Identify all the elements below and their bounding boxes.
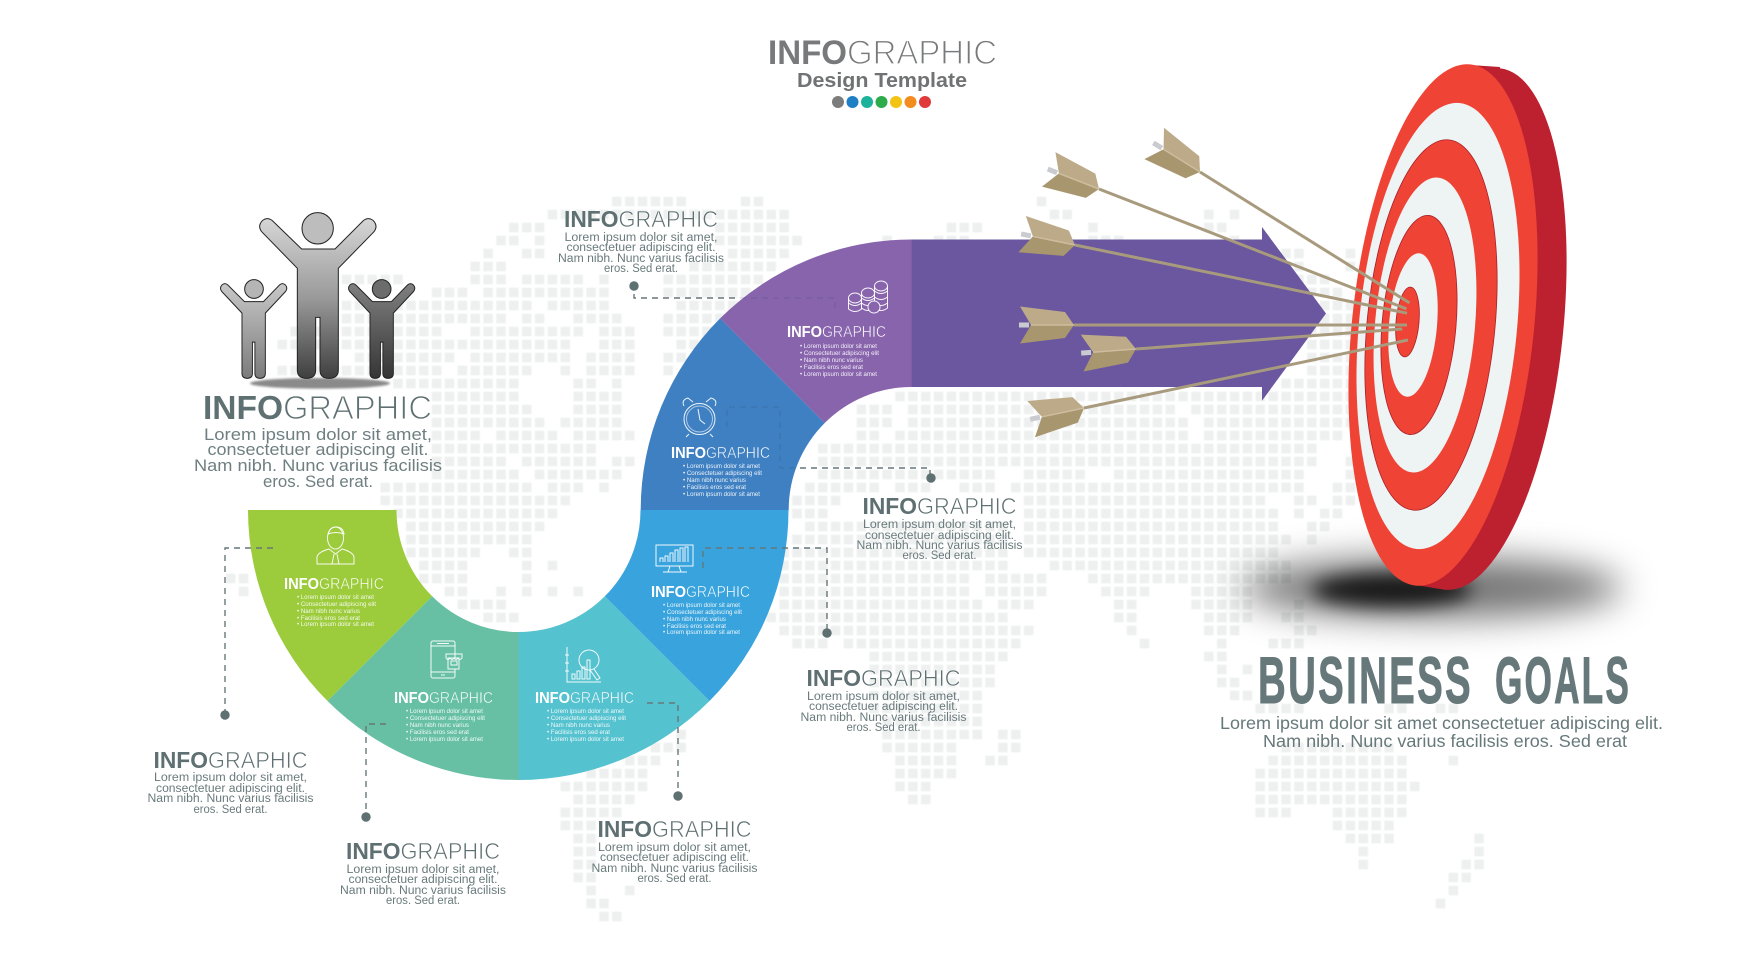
text block: step 2 caption: Nam nibh. Nunc varius facilisis	[340, 885, 506, 897]
text block: step 1 caption: Lorem ipsum dolor sit amet,	[154, 772, 307, 784]
callout leader: step 3	[647, 703, 683, 801]
panel: red target	[1325, 55, 1590, 599]
top title block	[768, 34, 997, 108]
panel: step 2 teal: • Consectetuer adipiscing elit	[406, 715, 485, 722]
icon: coin stacks	[848, 281, 888, 313]
text block: step 5 caption: consectetuer adipiscing elit.	[865, 530, 1014, 542]
arrow: bottom arrow in target	[1026, 322, 1412, 437]
text block: step 2 caption: Lorem ipsum dolor sit amet,	[346, 864, 500, 876]
callout leader: step 1	[220, 548, 273, 720]
left heading text block: eros. Sed erat.	[263, 473, 373, 491]
text block: step 4 caption: eros. Sed erat.	[846, 722, 920, 734]
text block: step 4 caption: consectetuer adipiscing elit.	[809, 701, 958, 713]
panel: step 6 purple: • Facilisis eros sed erat	[800, 364, 863, 371]
text block: step 5 caption: INFO	[862, 493, 917, 519]
panel: step 1 green: • Facilisis eros sed erat	[297, 615, 360, 622]
text block: step 1 caption: Nam nibh. Nunc varius facilisis	[148, 793, 314, 805]
panel: step 6 purple: INFO	[787, 324, 822, 341]
text block: step 4 caption	[800, 665, 967, 734]
top title block: INFO	[768, 34, 847, 72]
text block: step 5 caption	[856, 493, 1023, 562]
panel: step 4 sky blue: • Consectetuer adipiscing elit	[663, 609, 742, 616]
icon: chart and magnifier	[565, 647, 601, 682]
panel: step 4 sky blue: • Lorem ipsum dolor sit amet	[663, 629, 740, 636]
arrow: third arrow in target	[1017, 216, 1411, 331]
text block: step 6 caption: INFO	[564, 206, 618, 232]
panel: step 2 teal	[328, 596, 518, 780]
panel: business goals text: Nam nibh. Nunc varius facilisis eros. Sed erat	[1263, 731, 1627, 751]
text block: step 3 caption: eros. Sed erat.	[638, 873, 712, 885]
left heading text block: INFO	[203, 389, 283, 426]
panel: step 3 cyan: • Facilisis eros sed erat	[547, 729, 610, 736]
panel: step 5 dark blue: • Lorem ipsum dolor sit amet	[683, 491, 760, 498]
icon: monitor with bars	[656, 545, 693, 572]
text block: step 4 caption: INFO	[806, 665, 861, 691]
panel: step 5 dark blue: GRAPHIC	[706, 445, 770, 462]
text block: step 4 caption: Nam nibh. Nunc varius facilisis	[800, 712, 967, 724]
text block: step 3 caption: GRAPHIC	[652, 816, 752, 842]
text block: step 3 caption: consectetuer adipiscing elit.	[600, 852, 749, 864]
text block: step 5 caption: eros. Sed erat.	[902, 550, 976, 562]
panel: step 6 purple: • Consectetuer adipiscing elit	[800, 350, 879, 357]
arrow: top arrow in target	[1144, 127, 1419, 319]
panel: step 4 sky blue	[605, 510, 789, 701]
panel: step 1 green	[248, 510, 432, 701]
top title block: Design Template	[797, 70, 967, 92]
panel: business goals text: Lorem ipsum dolor sit amet consectetuer adipiscing elit.	[1220, 713, 1663, 733]
panel: step 2 teal: GRAPHIC	[429, 690, 493, 707]
top title block: GRAPHIC	[847, 34, 997, 72]
panel: step 6 purple	[720, 239, 912, 423]
text block: step 1 caption: INFO	[154, 747, 208, 773]
icon: family of three people	[221, 213, 415, 389]
panel: step 2 teal: • Facilisis eros sed erat	[406, 729, 469, 736]
left heading text block: Nam nibh. Nunc varius facilisis	[194, 457, 442, 475]
arrow: second arrow in target	[1041, 152, 1413, 326]
left heading text block: Lorem ipsum dolor sit amet,	[204, 426, 432, 444]
icon: businessman	[317, 527, 354, 564]
panel: step 2 teal: INFO	[394, 690, 429, 707]
text block: step 6 caption: Lorem ipsum dolor sit amet,	[564, 232, 718, 244]
panel: step 3 cyan: • Lorem ipsum dolor sit amet	[547, 736, 624, 743]
dotted world map background	[224, 202, 1486, 916]
panel: step 6 purple: GRAPHIC	[822, 324, 886, 341]
arrow: fifth arrow in target	[1080, 311, 1404, 372]
panel: step 2 teal: • Lorem ipsum dolor sit amet	[406, 736, 483, 743]
panel: step 6 purple: • Nam nibh nunc varius	[800, 357, 864, 364]
left heading text block: GRAPHIC	[283, 389, 432, 426]
text block: step 5 caption: Nam nibh. Nunc varius facilisis	[856, 540, 1023, 552]
panel: step 5 dark blue: • Facilisis eros sed erat	[683, 484, 746, 491]
panel: step 5 dark blue: • Nam nibh nunc varius	[683, 477, 747, 484]
text block: step 2 caption	[340, 838, 506, 907]
panel: step 4 sky blue: INFO	[651, 584, 686, 601]
text block: step 4 caption: Lorem ipsum dolor sit amet,	[807, 691, 960, 703]
text block: step 2 caption: INFO	[346, 838, 400, 864]
text block: step 6 caption: GRAPHIC	[618, 206, 718, 232]
text block: step 5 caption: Lorem ipsum dolor sit amet,	[863, 519, 1016, 531]
panel: step 4 sky blue: • Nam nibh nunc varius	[663, 616, 727, 623]
panel: step 5 dark blue: INFO	[671, 445, 706, 462]
panel: step 3 cyan: • Consectetuer adipiscing elit	[547, 715, 626, 722]
panel: step 2 teal: • Nam nibh nunc varius	[406, 722, 470, 729]
text block: step 3 caption: Nam nibh. Nunc varius facilisis	[592, 863, 758, 875]
text block: step 5 caption: GRAPHIC	[917, 493, 1016, 519]
text block: step 2 caption: eros. Sed erat.	[386, 895, 460, 907]
text block: step 4 caption: GRAPHIC	[861, 665, 960, 691]
left heading text block	[194, 389, 442, 491]
callout leader: step 4	[703, 548, 832, 638]
panel: step 4 sky blue: • Lorem ipsum dolor sit amet	[663, 602, 740, 609]
panel: step 3 cyan: • Nam nibh nunc varius	[547, 722, 611, 729]
panel: step 2 teal: • Lorem ipsum dolor sit amet	[406, 708, 483, 715]
text block: step 3 caption: INFO	[598, 816, 652, 842]
left heading text block: consectetuer adipiscing elit.	[208, 441, 428, 459]
icon: mobile shop	[431, 641, 462, 678]
panel: target shadow	[1242, 558, 1622, 618]
panel: business goals text: GOALS	[1495, 643, 1631, 717]
panel: step 1 green: • Consectetuer adipiscing elit	[297, 601, 376, 608]
callout leader: step 5	[727, 407, 936, 483]
text block: step 1 caption: eros. Sed erat.	[194, 804, 268, 816]
text block: step 3 caption	[592, 816, 758, 885]
panel: step 4 sky blue: GRAPHIC	[686, 584, 750, 601]
panel: step 5 dark blue	[641, 318, 825, 510]
callout leader: step 2	[361, 724, 386, 822]
panel: step 1 green: • Lorem ipsum dolor sit amet	[297, 621, 374, 628]
text block: step 6 caption: eros. Sed erat.	[604, 263, 678, 275]
panel: step 6 arrow body	[911, 227, 1326, 401]
arrow: horizontal arrow in target	[1019, 306, 1407, 344]
panel: step 3 cyan: INFO	[535, 690, 570, 707]
panel: step 3 cyan: • Lorem ipsum dolor sit amet	[547, 708, 624, 715]
text block: step 1 caption	[148, 747, 314, 816]
panel: business goals text	[1220, 643, 1663, 751]
text block: step 1 caption: consectetuer adipiscing elit.	[156, 783, 305, 795]
panel: step 4 sky blue: • Facilisis eros sed erat	[663, 623, 726, 630]
panel: step 1 green: • Nam nibh nunc varius	[297, 608, 361, 615]
panel: step 1 green: • Lorem ipsum dolor sit amet	[297, 594, 374, 601]
panel: step 6 purple: • Lorem ipsum dolor sit amet	[800, 343, 877, 350]
text block: step 3 caption: Lorem ipsum dolor sit amet,	[598, 842, 751, 854]
panel: step 1 green: GRAPHIC	[319, 576, 384, 593]
panel: step 3 cyan: GRAPHIC	[570, 690, 634, 707]
text block: step 6 caption: Nam nibh. Nunc varius facilisis	[558, 253, 724, 265]
icon: alarm clock	[683, 398, 716, 437]
text block: step 6 caption: consectetuer adipiscing elit.	[566, 242, 716, 254]
text block: step 1 caption: GRAPHIC	[208, 747, 308, 773]
panel: step 5 dark blue: • Lorem ipsum dolor sit amet	[683, 463, 760, 470]
panel: step 6 purple: • Lorem ipsum dolor sit amet	[800, 371, 877, 378]
text block: step 2 caption: GRAPHIC	[400, 838, 500, 864]
panel: business goals text: BUSINESS	[1258, 643, 1473, 717]
panel: step 3 cyan	[518, 596, 710, 780]
panel: step 1 green: INFO	[284, 576, 319, 593]
panel: step 5 dark blue: • Consectetuer adipiscing elit	[683, 470, 762, 477]
text block: step 6 caption	[558, 206, 724, 275]
text block: step 2 caption: consectetuer adipiscing elit.	[348, 874, 498, 886]
callout leader: step 6	[629, 281, 835, 313]
